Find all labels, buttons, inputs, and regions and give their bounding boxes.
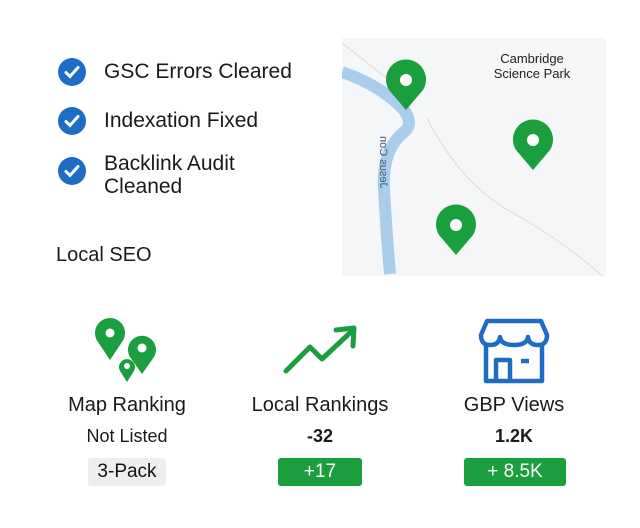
icon: trend arrow (284, 326, 356, 374)
column: Map Ranking: Map Ranking (68, 394, 186, 416)
check: backlink audit: Backlink Audit (104, 152, 235, 175)
icon: pins (95, 318, 156, 382)
column: GBP Views: 1.2K (495, 426, 533, 446)
map: Jesus Con (377, 136, 389, 188)
heading: Local SEO: Local SEO (56, 244, 152, 266)
badge: +17 (278, 458, 362, 486)
map label: Cambridge (500, 51, 564, 66)
check: GSC errors (58, 58, 292, 86)
badge: +8.5K (464, 458, 566, 486)
column: Map Ranking (68, 318, 186, 486)
column: GBP Views (464, 318, 566, 486)
pins (386, 59, 553, 255)
badge: +17: +17 (304, 461, 336, 482)
column: GBP Views: GBP Views (464, 394, 564, 416)
column: Map Ranking: Not Listed (86, 426, 168, 446)
column: Local Rankings: -32 (307, 426, 333, 446)
check: backlink audit: Cleaned (104, 175, 182, 198)
badge: 3-Pack: 3-Pack (97, 461, 157, 482)
check: indexation: Indexation Fixed (104, 109, 258, 132)
map: Science Park (494, 66, 571, 81)
check: indexation (58, 107, 258, 135)
badge: 3-Pack (88, 458, 166, 486)
check: GSC errors: GSC Errors Cleared (104, 60, 292, 83)
map (342, 38, 606, 276)
badge: +8.5K: + 8.5K (487, 461, 543, 482)
column: Local Rankings: Local Rankings (252, 394, 388, 416)
icon: store (478, 318, 550, 384)
check: backlink audit (58, 152, 235, 198)
column: Local Rankings (252, 326, 388, 486)
